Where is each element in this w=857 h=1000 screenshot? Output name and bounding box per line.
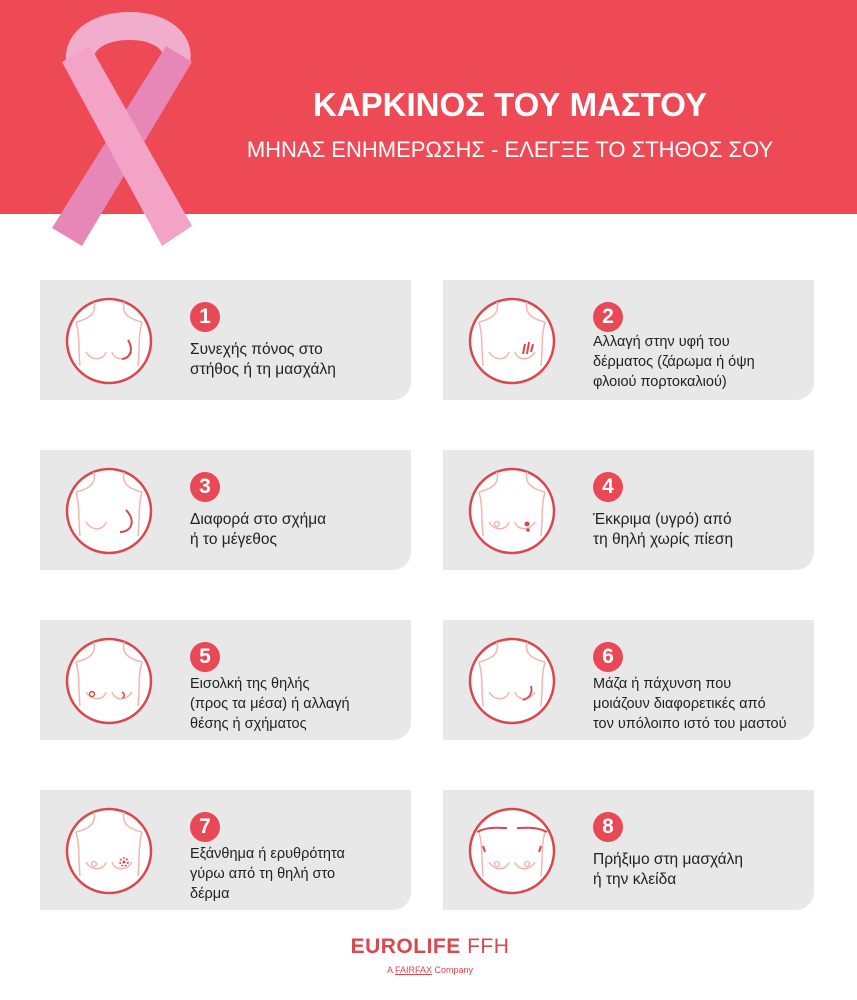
- card 7: δέρμα: [190, 886, 230, 902]
- card 4: 4: [602, 475, 614, 498]
- card 2: [443, 280, 814, 400]
- logo: Eurolife FFH: EUROLIFE FFH: [351, 935, 509, 958]
- card 1: [40, 280, 411, 400]
- card 8: 8: [602, 815, 614, 838]
- card 2: 2: [602, 305, 614, 328]
- icon: pink ribbon: [52, 12, 192, 246]
- logo: Eurolife FFH: [351, 935, 509, 975]
- card 7: [40, 790, 411, 910]
- card 6: [443, 620, 814, 740]
- card 3: Διαφορά στο σχήμα: [190, 511, 326, 528]
- card 7: Εξάνθημα ή ερυθρότητα: [190, 846, 345, 862]
- card 1: 1: [199, 305, 211, 328]
- card 5: Εισολκή της θηλής: [190, 676, 309, 692]
- card 8: ή την κλείδα: [593, 871, 676, 888]
- card 3: [40, 450, 411, 570]
- card 6: 6: [602, 645, 614, 668]
- card 6: μοιάζουν διαφορετικές από: [593, 696, 766, 712]
- subtitle: ΜΗΝΑΣ ΕΝΗΜΕΡΩΣΗΣ - ΕΛΕΓΞΕ ΤΟ ΣΤΗΘΟΣ ΣΟΥ: [247, 137, 773, 162]
- card 5: θέσης ή σχήματος: [190, 716, 307, 732]
- card 1: Συνεχής πόνος στο: [190, 341, 323, 358]
- card 2: Αλλαγή στην υφή του: [593, 334, 730, 350]
- card 5: [40, 620, 411, 740]
- card 5: 5: [199, 645, 211, 668]
- header banner: [0, 0, 857, 214]
- card 4: [443, 450, 814, 570]
- card 2: δέρματος (ζάρωμα ή όψη: [593, 354, 755, 370]
- card 3: ή το μέγεθος: [190, 531, 277, 548]
- card 4: τη θηλή χωρίς πίεση: [593, 531, 733, 548]
- card 5: (προς τα μέσα) ή αλλαγή: [190, 696, 350, 712]
- card 7: 7: [199, 815, 211, 838]
- card 3: 3: [199, 475, 211, 498]
- card 1: στήθος ή τη μασχάλη: [190, 361, 336, 378]
- card 8: Πρήξιμο στη μασχάλη: [593, 851, 743, 868]
- card 2: φλοιού πορτοκαλιού): [593, 374, 727, 390]
- title: ΚΑΡΚΙΝΟΣ ΤΟΥ ΜΑΣΤΟΥ: [313, 86, 707, 123]
- card 8: [443, 790, 814, 910]
- card 6: τον υπόλοιπο ιστό του μαστού: [593, 716, 787, 732]
- card 6: Μάζα ή πάχυνση που: [593, 676, 731, 692]
- card 4: Έκκριμα (υγρό) από: [593, 511, 732, 528]
- card 7: γύρω από τη θηλή στο: [190, 866, 335, 882]
- logo: Eurolife FFH: A FAIRFAX Company: [387, 965, 473, 975]
